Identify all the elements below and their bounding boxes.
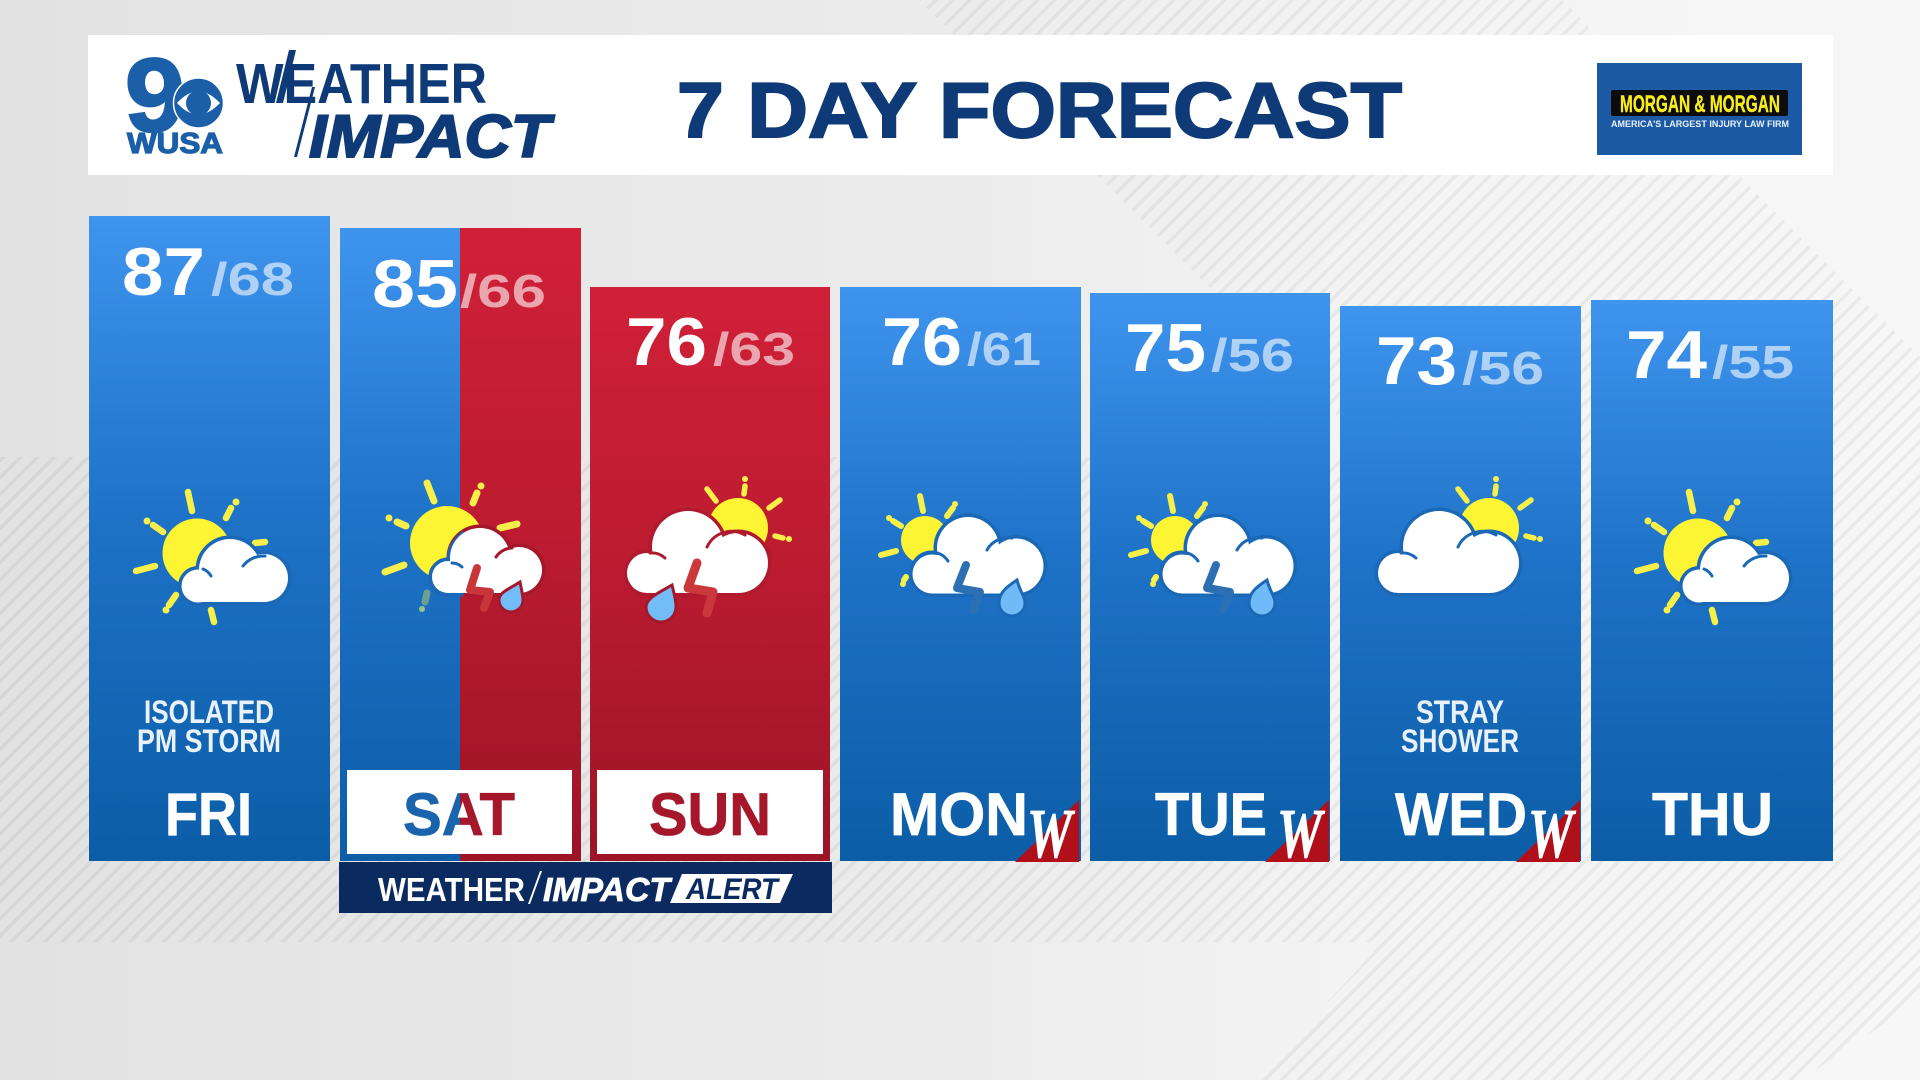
temperatures (882, 304, 1041, 380)
sponsor: Morgan and Morgan (1597, 63, 1802, 155)
day label: MON (890, 781, 1028, 848)
logo: WUSA 9: WUSA (127, 128, 223, 160)
day label box (597, 770, 823, 854)
panel: Friday (89, 216, 330, 861)
icon: Nationals W: W (1528, 796, 1576, 873)
logo: Weather Impact: IMPACT (309, 103, 555, 170)
temperatures (626, 304, 795, 380)
day label: WED (1395, 781, 1527, 848)
icon: partly sunny (136, 492, 288, 622)
temperatures: /63 (713, 323, 795, 375)
temperatures: 75 (1125, 310, 1206, 386)
temperatures: /56 (1211, 329, 1294, 381)
weather impact alert banner: WEATHER (378, 871, 525, 908)
temperatures (122, 234, 294, 310)
temperatures: 87 (122, 234, 205, 310)
temperatures: 76 (882, 304, 962, 380)
day label: FRI (165, 781, 252, 848)
forecast note: SHOWER (1401, 723, 1519, 759)
weather impact alert banner: IMPACT (543, 871, 673, 908)
day label box (347, 770, 572, 854)
logo: Weather Impact: WEATHER (236, 52, 487, 116)
temperatures: /66 (460, 265, 546, 317)
forecast note (1401, 694, 1519, 759)
logo: Weather Impact (236, 50, 555, 170)
temperatures: /61 (967, 323, 1041, 375)
temperatures: /55 (1712, 336, 1794, 388)
logo: WUSA 9 (125, 38, 224, 160)
temperatures: /68 (211, 253, 294, 305)
day label: TUE (1155, 781, 1267, 848)
forecast note: ISOLATED (144, 694, 274, 730)
icon: Nationals W: W (1027, 796, 1075, 873)
sponsor: Morgan and Morgan: AMERICA'S LARGEST INJURY LAW FIRM (1611, 119, 1789, 130)
temperatures: 85 (372, 246, 458, 322)
header bar (88, 35, 1833, 175)
panel: Saturday: SAT (403, 781, 515, 848)
panel: Tuesday (1090, 293, 1330, 873)
temperatures: 76 (626, 304, 707, 380)
title: 7 DAY FORECAST (677, 66, 1402, 154)
forecast note: STRAY (1416, 694, 1504, 730)
temperatures: 74 (1626, 317, 1707, 393)
forecast note: PM STORM (137, 723, 281, 759)
panel: Thursday (1591, 300, 1833, 861)
panel: Wednesday (1340, 306, 1581, 873)
temperatures (1125, 310, 1294, 386)
temperatures (1376, 323, 1544, 399)
day label: THU (1652, 781, 1773, 848)
icon: storm (627, 476, 792, 622)
temperatures (372, 246, 546, 322)
panel: Monday (840, 287, 1081, 873)
temperatures (1626, 317, 1794, 393)
icon: partly sunny (1637, 492, 1789, 622)
sponsor: Morgan and Morgan: MORGAN & MORGAN (1620, 91, 1780, 118)
icon: storm (1131, 496, 1294, 616)
panel: Sunday (590, 287, 830, 861)
panel: Saturday (340, 228, 581, 861)
logo: WUSA 9: 9 (125, 38, 185, 154)
panel: Sunday: SUN (649, 781, 771, 848)
weather impact alert banner (339, 862, 832, 913)
icon: sun and storm split (385, 482, 542, 612)
weather impact alert banner: ALERT (685, 873, 780, 906)
forecast note (137, 694, 281, 759)
temperatures: 73 (1376, 323, 1457, 399)
icon: mostly cloudy (1378, 476, 1543, 593)
icon: Nationals W: W (1277, 796, 1325, 873)
icon: storm (881, 496, 1044, 616)
temperatures: /56 (1462, 342, 1544, 394)
